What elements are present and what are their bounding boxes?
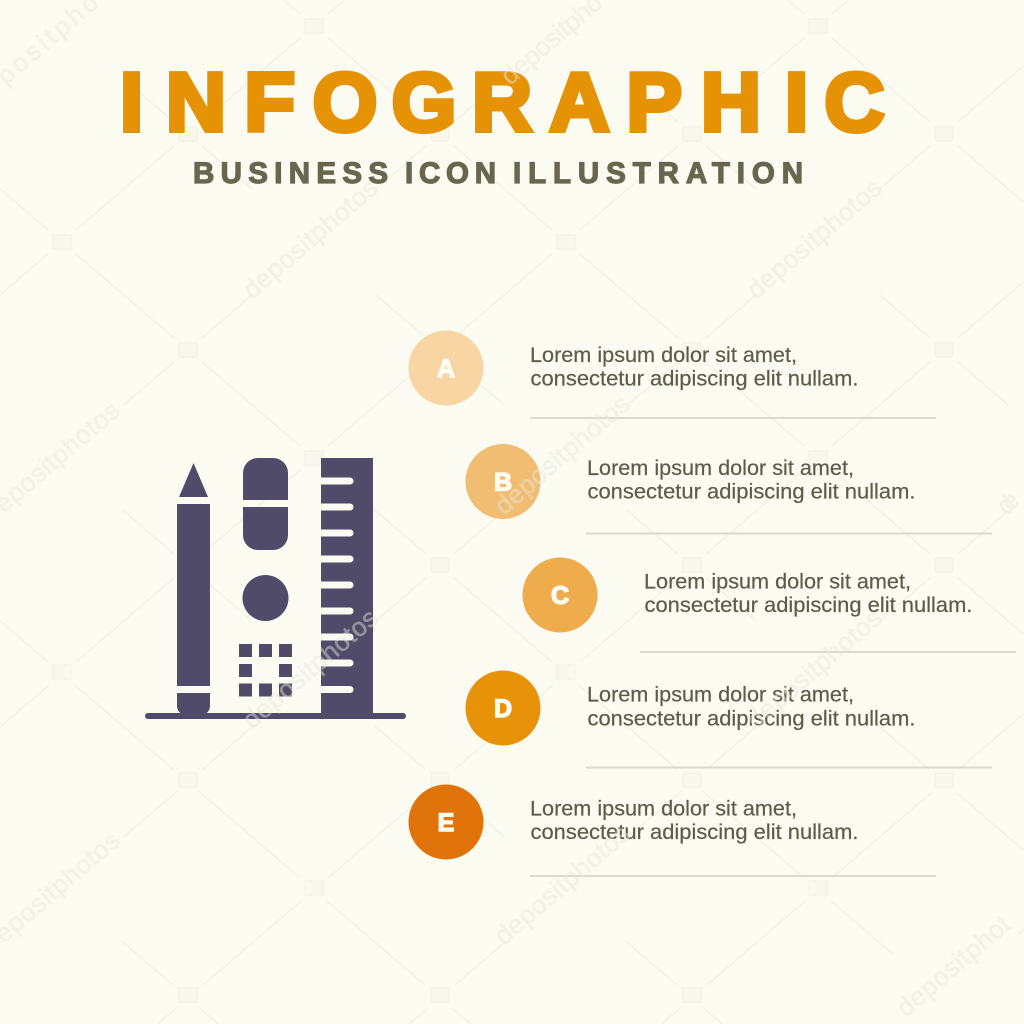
step B <box>466 444 992 534</box>
text block C: Lorem ipsum dolor sit amet, <box>644 570 911 594</box>
step D <box>466 670 992 768</box>
badge A <box>408 330 484 406</box>
badge D <box>466 670 540 746</box>
text block B: consectetur adipiscing elit nullam. <box>588 480 916 504</box>
text block D <box>587 684 916 730</box>
watermark text: depositphot <box>890 908 1017 1023</box>
subtitle <box>193 157 803 190</box>
icon: pencil, eraser, circle, selection grid and ruler <box>145 458 406 719</box>
icon: circle <box>242 575 288 621</box>
badge C <box>522 558 598 632</box>
icon: pencil <box>177 463 210 715</box>
watermark text: depositphotos <box>488 388 635 521</box>
text block A: consectetur adipiscing elit nullam. <box>530 368 858 390</box>
step C <box>522 558 1016 653</box>
subtitle: BUSINESS <box>193 157 388 190</box>
text block D: Lorem ipsum dolor sit amet, <box>587 684 854 706</box>
badge E <box>408 784 484 860</box>
letter E: E <box>438 809 454 837</box>
letter A: A <box>437 355 455 383</box>
watermark text: depositphotos <box>488 818 635 951</box>
text block C <box>644 570 972 617</box>
step E <box>408 784 936 877</box>
icon: ruler <box>321 458 373 716</box>
text block E <box>530 798 858 844</box>
watermark text: depositphotos <box>740 602 887 735</box>
text block A <box>530 344 858 390</box>
icon: baseline <box>145 713 406 719</box>
icon: eraser <box>243 458 288 550</box>
watermark text: depositphotos <box>740 172 887 305</box>
step A <box>408 330 936 419</box>
text block B: Lorem ipsum dolor sit amet, <box>587 457 854 480</box>
text block E: consectetur adipiscing elit nullam. <box>530 821 858 844</box>
watermark text: depositphotos <box>236 602 383 735</box>
subtitle: ICON <box>405 157 496 190</box>
text block A: Lorem ipsum dolor sit amet, <box>530 344 797 367</box>
text block B <box>587 457 916 504</box>
text block E: Lorem ipsum dolor sit amet, <box>530 798 797 820</box>
letter B: B <box>494 468 512 496</box>
text block D: consectetur adipiscing elit nullam. <box>588 708 916 730</box>
badge B <box>466 444 540 519</box>
subtitle: ILLUSTRATION <box>513 157 803 190</box>
watermark text: depositphotos <box>236 172 383 305</box>
letter D: D <box>494 695 512 723</box>
icon: square selection grid <box>239 644 292 696</box>
letter C: C <box>551 582 569 610</box>
title: INFOGRAPHIC <box>120 56 884 148</box>
text block C: consectetur adipiscing elit nullam. <box>644 594 972 617</box>
